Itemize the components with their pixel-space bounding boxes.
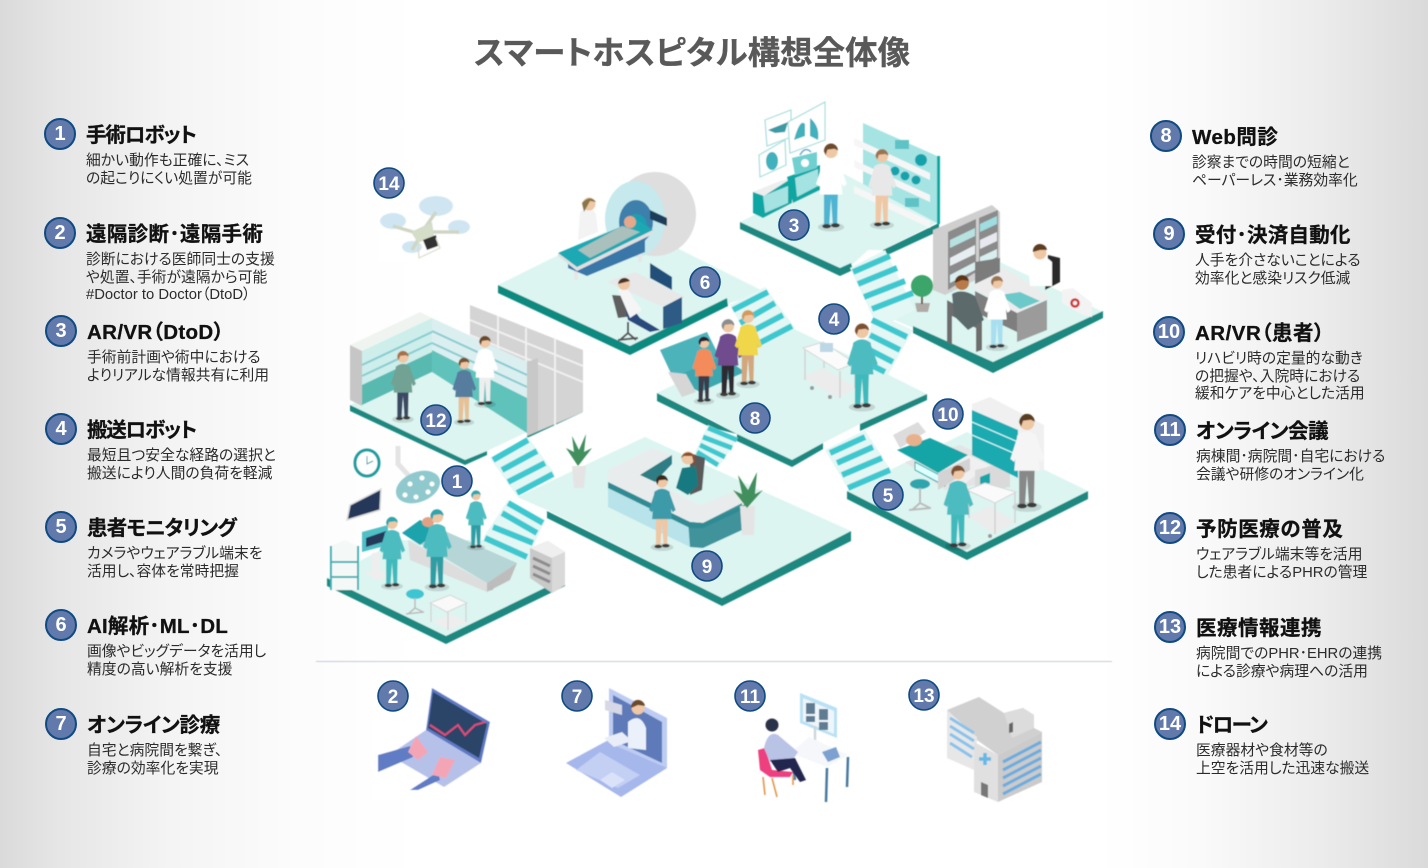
description 7 (87, 742, 222, 777)
floor: operating room (327, 540, 565, 644)
list item 7 (45, 708, 222, 777)
stairs: pharmacy to reception (490, 437, 555, 496)
badge 4 (819, 304, 849, 334)
scene: pharmacy cabinets (350, 305, 583, 436)
badge 14: 14 (378, 174, 400, 195)
scene: nurse at MRI (578, 198, 598, 240)
scene: instrument cart (430, 595, 467, 630)
scene: storage locker (530, 541, 565, 593)
description 9: 効率化と感染リスク低減 (1195, 271, 1350, 287)
description 6: 精度の高い解析を支援 (87, 662, 232, 678)
number 10: 10 (1158, 321, 1180, 343)
description 14: 医療器材や食材等の (1196, 743, 1328, 759)
scene: visitor at reception (649, 475, 676, 551)
badge 3: 3 (789, 216, 799, 237)
scene: pharmacy people (391, 336, 498, 426)
scene: organ posters and cabinets (753, 102, 825, 218)
description 10: の把握や、入院時における (1195, 369, 1360, 385)
badge 6 (690, 267, 720, 297)
badge 4: 4 (829, 310, 840, 331)
stairs: waiting to consultation (860, 313, 913, 375)
badge 3 (779, 210, 809, 240)
number 13: 13 (1159, 616, 1181, 638)
scene: MRI scanner (558, 172, 696, 280)
description 10: 緩和ケアを中心とした活用 (1195, 386, 1365, 402)
number 1: 1 (54, 123, 66, 145)
list item 11 (1154, 414, 1385, 483)
floor: waiting area (657, 328, 927, 467)
scene: operating monitor (362, 525, 392, 580)
badge 11 (735, 681, 765, 711)
description 14 (1196, 742, 1369, 777)
scene: doctor in room 3 (816, 144, 847, 232)
description 7: 診療の効率化を実現 (87, 761, 219, 777)
scene: waiting patients (692, 310, 762, 405)
description 2: #Doctor to Doctor（DtoD） (86, 287, 250, 303)
scene: woman at desk (984, 276, 1010, 351)
separator line (316, 660, 1112, 662)
list item 6 (45, 609, 266, 678)
number 2: 2 (54, 222, 66, 244)
floor: consultation room (877, 262, 1103, 373)
description 5: カメラやウェアラブル端末を (87, 546, 262, 562)
heading 5: 患者モニタリング (87, 516, 236, 540)
heading 2: 遠隔診断･遠隔手術 (86, 222, 263, 246)
description 12 (1196, 546, 1367, 581)
description 2: 診断における医師同士の支援 (86, 252, 275, 268)
scene: operating table (402, 517, 517, 596)
badge 8: 8 (750, 409, 760, 430)
heading 7: オンライン診療 (87, 714, 220, 736)
floor: patient room (847, 432, 1088, 560)
scene: surgeons (380, 490, 487, 591)
number 9: 9 (1163, 223, 1175, 245)
scene: doctor at desk (1028, 244, 1060, 290)
heading 12: 予防医療の普及 (1196, 518, 1343, 540)
scene: receptionist (676, 452, 705, 495)
badge 7 (562, 681, 592, 711)
heading 1: 手術ロボット (86, 124, 196, 146)
description 3 (87, 349, 269, 384)
description 11: 会議や研修のオンライン化 (1196, 467, 1364, 483)
scene: hospital bed (893, 422, 1010, 492)
stairs: MRI to waiting (730, 287, 795, 350)
number 3 (45, 315, 77, 347)
scene: stool (909, 479, 931, 510)
icon: online meeting desk (758, 693, 848, 802)
number 6 (45, 609, 77, 641)
description 4: 搬送により人間の負荷を軽減 (87, 466, 272, 482)
description 6: 画像やビッグデータを活用し (87, 644, 266, 660)
description 10 (1195, 350, 1365, 402)
badge 7: 7 (572, 687, 582, 708)
icon: online consultation laptop (566, 688, 667, 797)
description 8: 診察までの時間の短縮と (1192, 155, 1350, 171)
list item 10 (1153, 316, 1365, 402)
scene: medicine shelves (854, 123, 940, 228)
heading 9: 受付･決済自動化 (1195, 224, 1351, 246)
description 14: 上空を活用した迅速な搬送 (1196, 761, 1369, 777)
scene: seated patient and chair (947, 275, 984, 352)
description 3: 手術前計画や術中における (87, 350, 261, 366)
stairs: waiting to reception (695, 425, 738, 468)
number 4 (45, 413, 77, 445)
list item 1 (44, 118, 252, 187)
stairs: operating room to reception (483, 500, 545, 560)
scene: consultation desk (970, 258, 1050, 342)
description 9 (1195, 252, 1361, 287)
number 11 (1154, 414, 1186, 446)
badge 14 (374, 168, 404, 198)
description 13: による診療や病理への活用 (1196, 664, 1368, 680)
number 6: 6 (55, 614, 67, 636)
description 4 (87, 447, 276, 482)
heading 3: AR/VR（DtoD） (87, 320, 224, 344)
badge 11: 11 (740, 687, 760, 708)
badge 8 (740, 403, 770, 433)
list item 13 (1154, 611, 1382, 680)
description 10: リハビリ時の定量的な動き (1195, 351, 1363, 367)
floor: room 3 (740, 172, 939, 276)
number 12: 12 (1159, 517, 1181, 539)
stairs: room 3 to consultation (850, 250, 915, 328)
description 12: した患者によるPHRの管理 (1196, 565, 1367, 581)
stairs: waiting to patient room (825, 430, 892, 492)
heading 11: オンライン会議 (1196, 420, 1328, 442)
title: スマートホスピタル構想全体像 (474, 35, 910, 71)
number 13 (1154, 611, 1186, 643)
badge 12 (421, 405, 451, 435)
description 6 (87, 643, 266, 678)
description 3: よりリアルな情報共有に利用 (87, 368, 269, 384)
number 8 (1150, 120, 1182, 152)
heading 8: Web問診 (1192, 126, 1278, 148)
scene: first aid case (1062, 288, 1092, 317)
number 3: 3 (55, 320, 67, 342)
list item 2 (44, 217, 275, 303)
badge 5 (873, 480, 903, 510)
number 8: 8 (1160, 125, 1172, 147)
number 7: 7 (55, 713, 67, 735)
scene: surgical lamp (391, 446, 445, 510)
scene: plant (911, 275, 933, 312)
list item 12 (1154, 512, 1367, 581)
scene: reception plants (566, 434, 763, 535)
scene: operating room stool (406, 589, 424, 614)
list item 8 (1150, 120, 1358, 189)
icon: drone (379, 192, 472, 262)
badge 10 (933, 399, 963, 429)
scene: doctor in patient room (1010, 414, 1045, 512)
scene: medical cabinet (972, 397, 1044, 478)
number 5 (45, 511, 77, 543)
list item 4 (45, 413, 276, 482)
icon: hospital building (947, 697, 1042, 802)
heading 6: AI解析･ML･DL (87, 614, 228, 638)
scene: instrument rack (330, 540, 358, 590)
badge 6: 6 (700, 273, 710, 294)
description 8 (1192, 154, 1358, 189)
heading 10: AR/VR（患者） (1195, 322, 1325, 344)
badge 1 (442, 466, 472, 496)
scene: AI analysis desk (607, 263, 685, 340)
description 2 (86, 251, 275, 303)
description 12: ウェアラブル端末等を活用 (1196, 547, 1362, 563)
badge 9: 9 (702, 557, 712, 578)
list item 5 (45, 511, 262, 580)
badge 13 (909, 680, 939, 710)
heading 13: 医療情報連携 (1196, 616, 1322, 640)
number 7 (45, 708, 77, 740)
floor: reception (517, 437, 851, 606)
number 10 (1153, 316, 1185, 348)
list item 3 (45, 315, 269, 384)
badge 1: 1 (452, 472, 463, 493)
number 11: 11 (1159, 419, 1181, 441)
description 2: や処置、手術が遠隔から可能 (86, 270, 267, 286)
badge 13: 13 (913, 686, 935, 707)
number 4: 4 (55, 418, 67, 440)
scene: nurse in room 3 (868, 149, 896, 229)
description 8: ペーパーレス･業務効率化 (1192, 173, 1358, 189)
badge 10: 10 (937, 405, 959, 426)
description 7: 自宅と病院間を繋ぎ、 (87, 743, 222, 759)
description 1: 細かい動作も正確に、ミス (86, 153, 249, 169)
description 1 (86, 152, 252, 187)
scene: waiting bench (660, 332, 745, 397)
floor: MRI room (498, 222, 765, 355)
scene: patient monitoring cart and nurse (944, 465, 1016, 550)
badge 12: 12 (425, 411, 447, 432)
description 9: 人手を介さないことによる (1195, 253, 1361, 269)
description 4: 最短且つ安全な経路の選択と (87, 448, 276, 464)
badge 9 (692, 551, 722, 581)
scene: wall monitor (347, 489, 381, 520)
description 5: 活用し、容体を常時把握 (87, 564, 239, 580)
description 1: の起こりにくい処置が可能 (86, 171, 252, 187)
scene: reception counter (608, 448, 748, 548)
number 5: 5 (55, 516, 67, 538)
icon: remote diagnosis laptop (372, 677, 495, 800)
description 5 (87, 545, 262, 580)
description 13: 病院間でのPHR･EHRの連携 (1196, 646, 1382, 662)
description 11 (1196, 448, 1385, 483)
description 11: 病棟間･病院間･自宅における (1196, 449, 1385, 465)
scene: consultation shelf (933, 205, 1000, 295)
number 14: 14 (1159, 713, 1181, 735)
floor: pharmacy (350, 350, 583, 465)
heading 14: ドローン (1196, 714, 1266, 736)
scene: transport cart and nurse (802, 324, 878, 412)
number 12 (1154, 512, 1186, 544)
number 1 (44, 118, 76, 150)
number 9 (1153, 218, 1185, 250)
number 2 (44, 217, 76, 249)
badge 5: 5 (883, 486, 894, 507)
heading 4: 搬送ロボット (87, 418, 196, 442)
list item 14 (1154, 708, 1369, 777)
scene: clock (355, 450, 379, 476)
badge 2: 2 (388, 687, 398, 708)
badge 2 (378, 681, 408, 711)
description 13 (1196, 645, 1382, 680)
list item 9 (1153, 218, 1361, 287)
number 14 (1154, 708, 1186, 740)
